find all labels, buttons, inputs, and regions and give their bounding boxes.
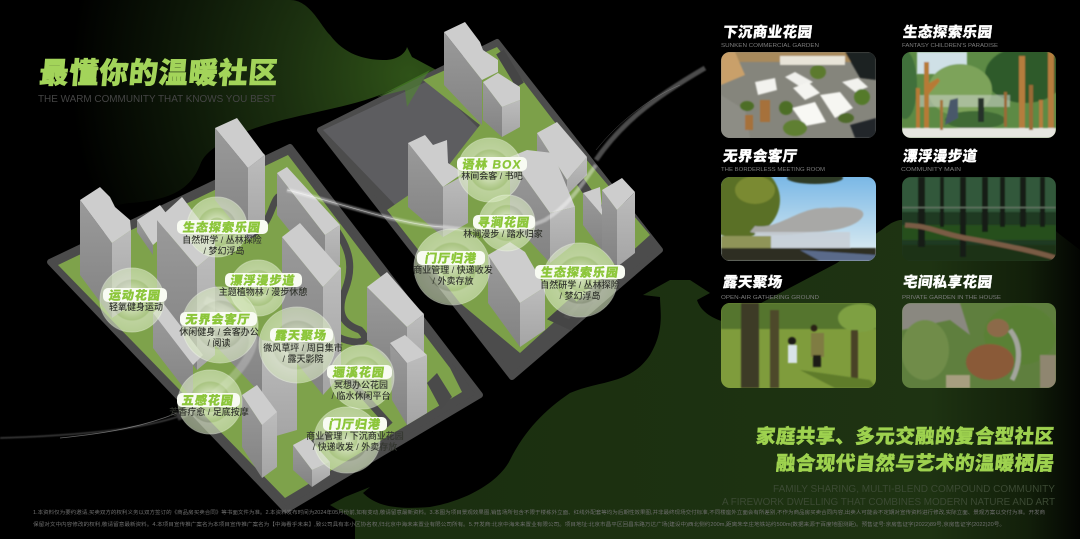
building: lower west slab (153, 303, 203, 400)
building: north tower (215, 118, 265, 240)
title (38, 57, 279, 105)
label: 门厅归港 south: 商业管理 / 下沉商业花园 (306, 430, 404, 441)
courtyard patch (427, 373, 452, 409)
label: 门厅归港 south: / 快递收发 / 外卖存放 (313, 441, 397, 452)
gallery card: sunken commercial garden (721, 23, 876, 138)
slogan english line 1: FAMILY SHARING, MULTI-BLEND COMPOUND COMMUNITY (773, 483, 1055, 495)
building: wing (137, 205, 175, 255)
label: 寻涧花园: 林涧漫步 / 踏水归家 (463, 228, 543, 239)
building: west tower (80, 187, 131, 318)
gallery card: private garden in the house: PRIVATE GARDEN IN THE HOUSE (902, 295, 1001, 301)
label: 门厅归港 south (306, 417, 404, 452)
circle halos: right site (414, 138, 617, 317)
gallery card: private garden in the house (901, 273, 1056, 388)
slogan chinese line 2: 融合现代自然与艺术的温暖栖居 (775, 452, 1055, 475)
label: 生态探索乐园: / 梦幻浮岛 (203, 245, 245, 256)
label: 语林 BOX: 林间会客 / 书吧 (461, 170, 523, 181)
gallery card: open-air gathering ground: OPEN-AIR GATHERING GROUND (721, 295, 819, 301)
disclaimer: 保留对文中内容修改的权利,敬请留意最新资料。4.本项目宣传推广案名为本项目宣传推广案名为【中海看乎未来】,致公司具有本小区协名权,归北京中海未来置业有限公司所有。5.开发商:北京中海未来置业有限公司。项目地址:北京市昌平区回昌东路万达广场(建设中)西北侧约200m,距离朱辛庄地铁站约500m(数据来源于百度地图测距)。预售证号:京房售证字(2022)89号,京房售证字(2022)20号。 (33, 520, 1005, 528)
lawn: right site (387, 47, 650, 353)
label: 无界会客厅 (179, 312, 259, 348)
building: east block (537, 122, 587, 195)
label: 露天聚场: 微风草坪 / 周日集市 (263, 342, 343, 353)
label: 生态探索乐园 (177, 220, 268, 256)
gallery card: fantasy children's paradise: FANTASY CHILDREN'S PARADISE (902, 43, 998, 49)
main heading: 最懂你的温暖社区 (38, 57, 279, 90)
gallery card: open-air gathering ground (721, 274, 882, 388)
gallery card: community main: COMMUNITY MAIN (901, 167, 961, 173)
label: 露天聚场: 露天聚场 (274, 329, 328, 342)
label: 漂浮漫步道: 漂浮漫步道 (229, 273, 297, 287)
label: 生态探索乐园 east (535, 265, 625, 301)
background: lower-right green blob (330, 220, 1080, 539)
building: corner tower (390, 335, 427, 425)
hotspot labels (103, 157, 625, 452)
photo: sunken garden (721, 52, 876, 138)
label: 五感花园: 五感花园 (181, 393, 235, 407)
plot base: right site (320, 42, 660, 377)
label: 无界会客厅: 无界会客厅 (184, 312, 252, 326)
left site plan (50, 118, 480, 510)
label: 寻涧花园 (463, 215, 543, 239)
building: west tower (408, 135, 468, 237)
label: 生态探索乐园 east: 自然研学 / 丛林探险 (540, 279, 620, 290)
label: 露天聚场: / 露天影院 (282, 353, 324, 364)
building: east tower (282, 223, 341, 395)
label: 无界会客厅: / 阅读 (207, 337, 231, 348)
building: centre tower (510, 150, 575, 263)
label: 门厅归港 north (413, 251, 493, 286)
green blob overlay arrow (377, 70, 430, 107)
photo: aerial private garden (901, 303, 1056, 388)
building group: right site (408, 22, 635, 347)
building: southeast tower (367, 272, 424, 380)
label: 露天聚场 (263, 328, 343, 364)
slogan chinese line 1: 家庭共享、多元交融的复合型社区 (755, 425, 1055, 448)
gallery card: open-air gathering ground: 露天聚场 (722, 274, 784, 291)
grey terrace (323, 80, 487, 207)
disclaimer (33, 508, 1045, 528)
gallery card: sunken commercial garden: 下沉商业花园 (722, 23, 814, 41)
label: 生态探索乐园: 生态探索乐园 (182, 220, 262, 234)
building: small pavilion (293, 437, 330, 487)
label: 逦溪花园: 逦溪花园 (332, 365, 386, 379)
building: long east block (277, 167, 340, 275)
label: 运动花园: 轻氧健身运动 (109, 301, 163, 312)
slogan english line 2: A FIREWORK DWELLING THAT COMBINES MODERN NATURE AND ART (722, 496, 1056, 508)
gallery card: community main (901, 147, 1056, 261)
building: central tower (157, 197, 215, 370)
swoosh lines (0, 68, 705, 438)
slogan (722, 425, 1056, 508)
building group: left site (80, 118, 427, 487)
background: top-left green blob (0, 0, 440, 262)
photo: children on lawn (721, 303, 882, 388)
label: 门厅归港 north: 门厅归港 (424, 251, 478, 265)
label: 逦溪花园 (327, 365, 392, 401)
label: 生态探索乐园: 自然研学 / 丛林探险 (182, 234, 262, 245)
label: 漂浮漫步道 (219, 273, 307, 297)
gallery card: fantasy children's paradise: 生态探索乐园 (902, 23, 994, 41)
hotspot circles (100, 138, 617, 473)
plot base: left site (50, 147, 480, 510)
gallery card: borderless meeting room: THE BORDERLESS MEETING ROOM (721, 167, 825, 173)
gallery card: borderless meeting room: 无界会客厅 (722, 147, 799, 165)
label: 逦溪花园: 冥想办公花园 (334, 379, 388, 390)
label: 寻涧花园: 寻涧花园 (477, 215, 531, 229)
lawn: left site (58, 155, 462, 498)
label: 运动花园 (103, 288, 167, 312)
photo: timber play park (902, 52, 1056, 138)
label: 五感花园: 芳香疗愈 / 足底按摩 (169, 406, 249, 417)
disclaimer: 1.本资料仅为要约邀请,买卖双方的权利义务以双方签订的《商品房买卖合同》等书面文件为准。2.本资料发布时间为2024年05月份前,如有变动,敬请留意最新资料。3.本图为项目景观效果图,销售场所包含不限于楼栋外立面、红线外配套等均为后期性效果图,并非最终现场交付标准,不同楼座外立面会有所差别,不作为商品房买卖合同内容,出卖人可能会不定期对宣传资料进行修改,实际立面、景观方案以交付为准。开发商 (33, 508, 1045, 516)
photo: pavilion (721, 177, 876, 261)
label: 五感花园 (169, 393, 249, 417)
building: south tower (242, 385, 277, 478)
label: 语林 BOX: 语林 BOX (461, 157, 523, 171)
english subheading: THE WARM COMMUNITY THAT KNOWS YOU BEST (38, 94, 276, 105)
building: east pair right (602, 178, 635, 267)
label: 语林 BOX (457, 157, 527, 181)
label: 逦溪花园: / 临水休闲平台 (331, 390, 391, 401)
building: centre-east mass (215, 285, 297, 440)
label: 运动花园: 运动花园 (108, 288, 162, 302)
right site plan (320, 22, 660, 377)
building: north annex (483, 73, 520, 137)
label: 门厅归港 north: 商业管理 / 快递收发 (413, 264, 493, 275)
building: east pair left (583, 187, 602, 250)
gallery card: community main: 漂浮漫步道 (902, 147, 979, 165)
gallery card: fantasy children's paradise (902, 24, 1056, 138)
building: south tower (488, 242, 545, 347)
paving: right site (500, 52, 600, 325)
label: 生态探索乐园 east: 生态探索乐园 (540, 265, 620, 279)
label: 漂浮漫步道: 主题植物林 / 漫步休憩 (219, 286, 307, 297)
circle halos: left site (100, 197, 394, 473)
gallery card: private garden in the house: 宅间私享花园 (902, 273, 994, 291)
label: 无界会客厅: 休闲健身 / 会客办公 (179, 326, 259, 337)
label: 生态探索乐园 east: / 梦幻浮岛 (559, 290, 601, 301)
gallery card: borderless meeting room (721, 148, 876, 261)
building: north tower (444, 22, 498, 125)
gallery card: sunken commercial garden: SUNKEN COMMERCIAL GARDEN (721, 43, 819, 49)
paths: left site (250, 195, 390, 450)
photo: forest boardwalk (902, 177, 1056, 261)
label: 门厅归港 south: 门厅归港 (328, 417, 382, 431)
label: 门厅归港 north: / 外卖存放 (432, 275, 474, 286)
